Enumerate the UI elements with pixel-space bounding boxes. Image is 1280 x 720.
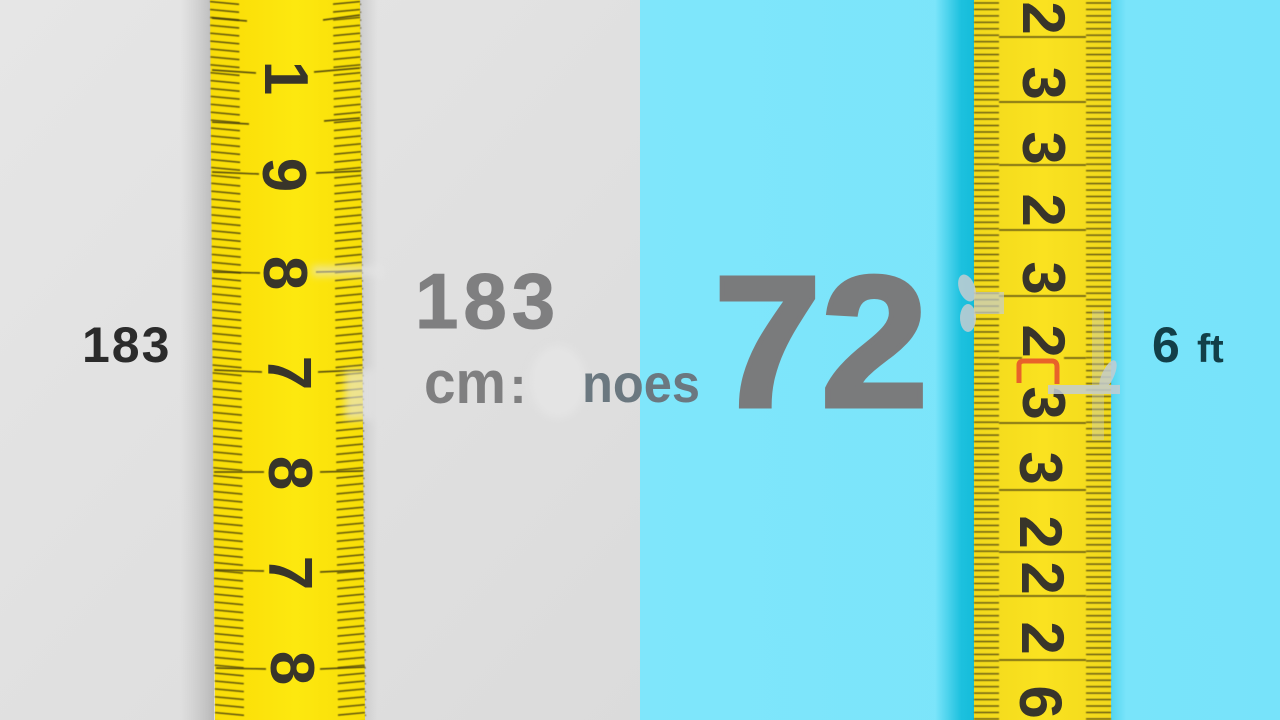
tape digits: 3 <box>1010 66 1077 100</box>
tape digits: 1 <box>251 61 320 95</box>
central metric: 72: 72 <box>714 239 928 446</box>
shadows of the tapes <box>180 0 1126 720</box>
right label: 6 ft: 6 <box>1152 317 1180 373</box>
background: cyan right half <box>640 0 1280 720</box>
smudges around centre text <box>312 266 586 420</box>
tape digits: 2 <box>1007 515 1074 549</box>
tape digits: 8 <box>250 256 319 290</box>
tape digits: 7 <box>254 356 323 390</box>
tape digits: 9 <box>249 158 318 192</box>
left measuring tape <box>210 0 366 720</box>
right measuring tape <box>974 0 1111 720</box>
central metric: 183 cm: cm <box>424 349 506 416</box>
tape digits: 2 <box>1009 561 1076 595</box>
central label: inches: noes <box>582 354 700 414</box>
tape digits <box>249 61 326 685</box>
tape digits <box>1007 1 1077 719</box>
tape digits: 3 <box>1010 261 1077 295</box>
tape digits: 2 <box>1010 193 1077 227</box>
grey smudges over right tape <box>955 272 1120 440</box>
central metric: 183 cm: : <box>509 357 527 415</box>
red glitch mark <box>1019 361 1057 384</box>
central metric: 183 cm: 183 <box>415 257 560 345</box>
central metric: 183 cm <box>415 257 560 416</box>
tape digits: 3 <box>1007 451 1074 485</box>
tape digits: 8 <box>255 456 324 490</box>
tape digits: 2 <box>1010 324 1077 358</box>
tape digits: 3 <box>1010 386 1077 420</box>
left label: 183: 183 <box>82 317 171 373</box>
tape digits: 2 <box>1010 1 1077 35</box>
tape digits: 3 <box>1010 131 1077 165</box>
right label: 6 ft: ft <box>1197 327 1224 371</box>
tape digits: 6 <box>1007 685 1074 719</box>
tape digits: 8 <box>257 651 326 685</box>
background: grey left half <box>0 0 640 720</box>
tape digits: 7 <box>255 556 324 590</box>
tape digits: 2 <box>1009 621 1076 655</box>
